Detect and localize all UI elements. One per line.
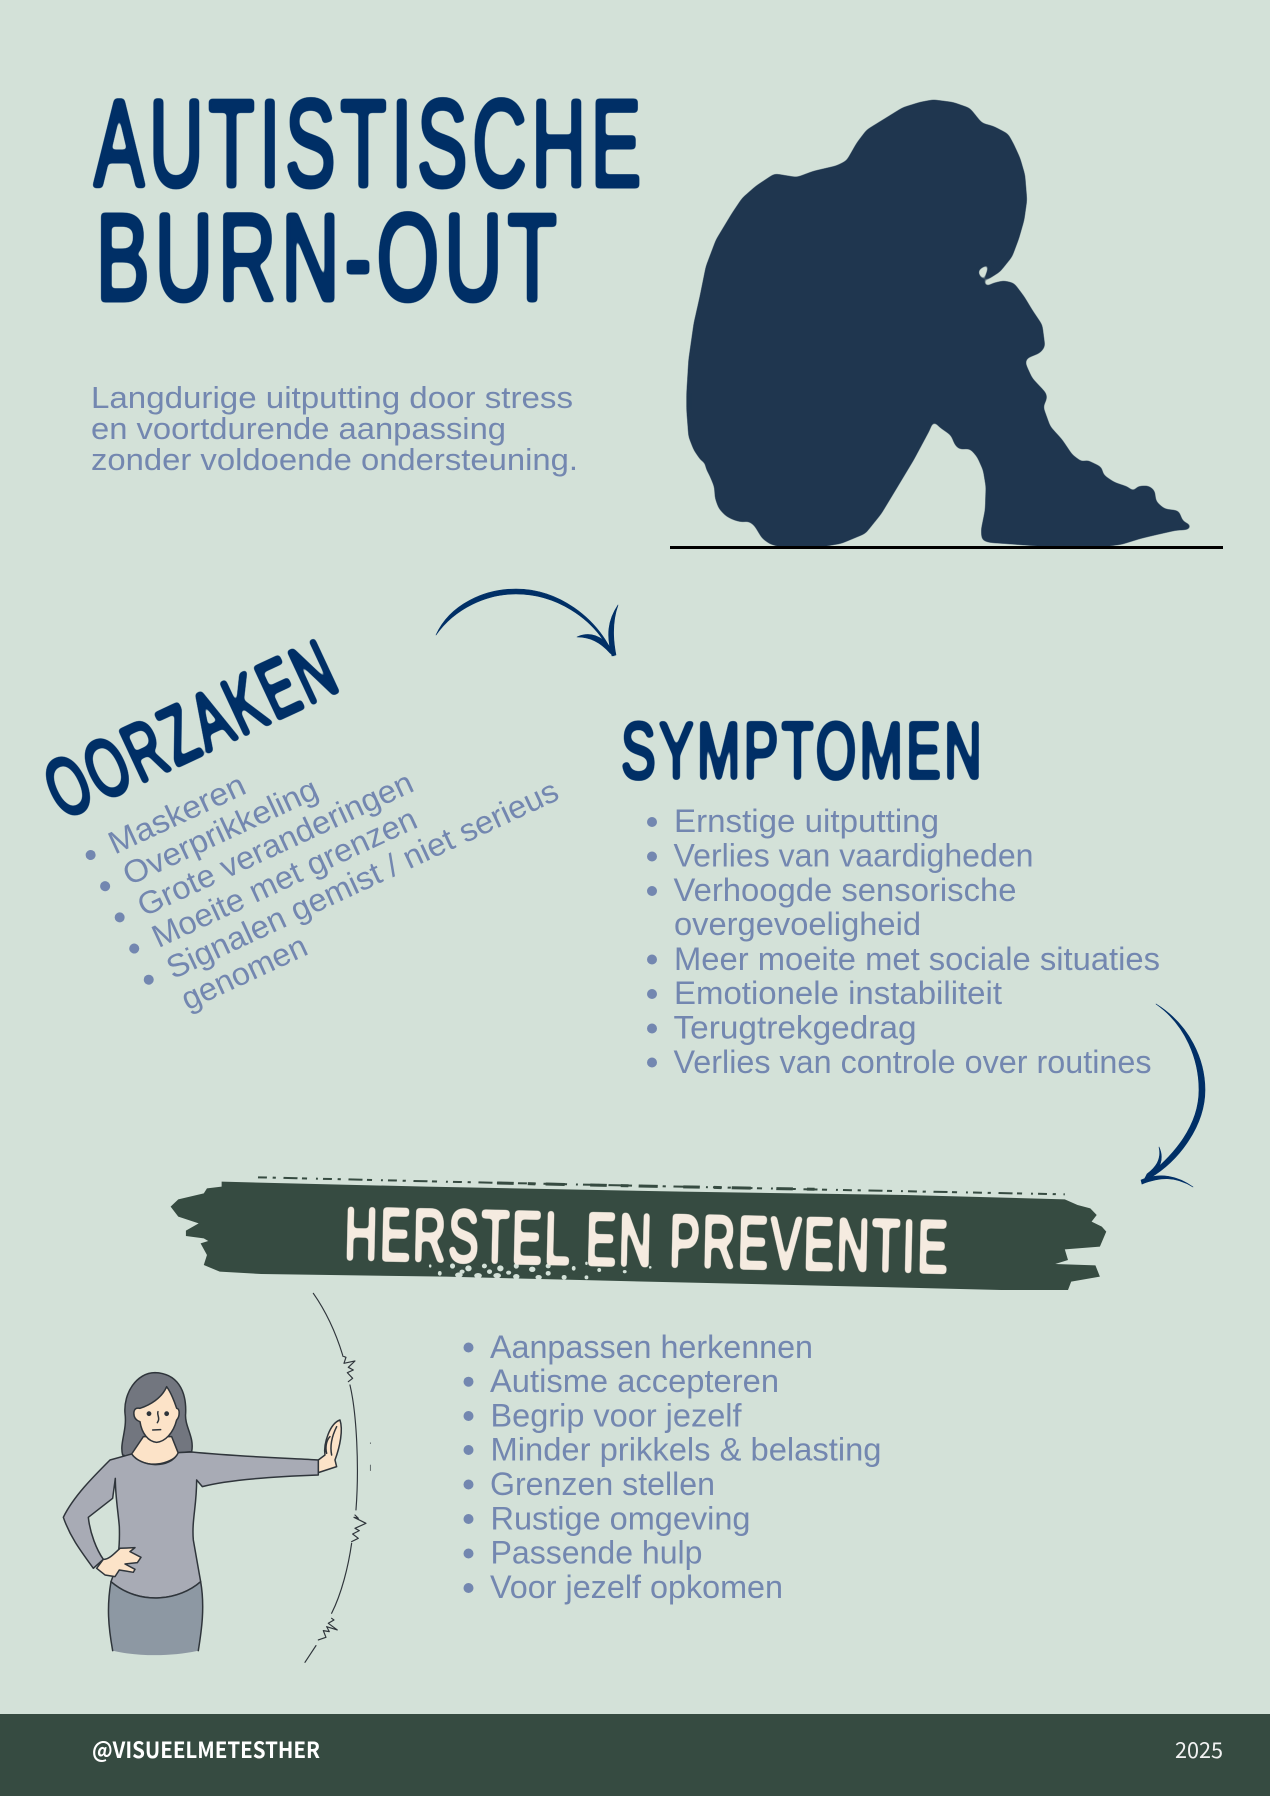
arrow: oorzaken to symptomen <box>436 589 618 656</box>
neck <box>132 1437 178 1464</box>
boundary line <box>305 1293 366 1662</box>
title: BURN-OUT <box>96 190 562 327</box>
list: oorzaken: Overprikkeling <box>117 770 323 892</box>
list: symptomen <box>647 803 1160 1080</box>
list: herstel en preventie: Passende hulp <box>490 1535 702 1571</box>
shirt <box>63 1452 318 1598</box>
list: herstel en preventie: Begrip voor jezelf <box>490 1397 742 1433</box>
list: herstel en preventie: Aanpassen herkennen <box>490 1329 813 1365</box>
hand on hip <box>97 1548 141 1577</box>
list: herstel en preventie: Minder prikkels & belasting <box>490 1432 882 1468</box>
list: symptomen: overgevoeligheid <box>674 906 921 942</box>
face <box>134 1387 179 1442</box>
list: herstel en preventie: Autisme accepteren <box>490 1363 779 1399</box>
list: oorzaken: genomen <box>175 927 313 1017</box>
footer: 2025 <box>1175 1733 1223 1765</box>
list: symptomen: Verlies van controle over routines <box>674 1044 1152 1080</box>
illustration: seated silhouette on ground line <box>670 100 1223 549</box>
title: AUTISTISCHE <box>94 76 646 213</box>
arrow: symptomen to herstel <box>1141 1004 1205 1187</box>
list: oorzaken: Moeite met grenzen <box>146 800 422 955</box>
list: oorzaken: Signalen gemist / niet serieus <box>161 772 564 986</box>
title <box>94 76 646 327</box>
list: herstel en preventie: Rustige omgeving <box>490 1500 750 1536</box>
footer <box>0 1714 1270 1796</box>
skirt <box>108 1582 203 1655</box>
facial features <box>147 1412 168 1430</box>
banner: herstel en preventie <box>171 1177 1106 1290</box>
list: herstel en preventie: Voor jezelf opkomen <box>490 1569 783 1605</box>
list: symptomen: Meer moeite met sociale situaties <box>674 941 1160 977</box>
heading: oorzaken: OORZAKEN <box>31 622 352 836</box>
list: symptomen: Terugtrekgedrag <box>674 1010 916 1046</box>
list: oorzaken: Grote veranderingen <box>132 764 419 923</box>
list: symptomen: Ernstige uitputting <box>674 803 939 839</box>
list: herstel en preventie: Grenzen stellen <box>490 1466 715 1502</box>
raised hand <box>318 1420 341 1473</box>
list: herstel en preventie <box>464 1329 882 1605</box>
intro text <box>91 380 578 477</box>
list: symptomen: Verlies van vaardigheden <box>674 838 1034 874</box>
list: oorzaken <box>78 648 578 1028</box>
heading: symptomen: SYMPTOMEN <box>621 706 985 795</box>
intro text: zonder voldoende ondersteuning. <box>91 442 578 477</box>
list: symptomen: Emotionele instabiliteit <box>674 975 1002 1011</box>
hair <box>122 1373 192 1457</box>
intro text: en voortdurende aanpassing <box>91 411 506 446</box>
list: symptomen: Verhoogde sensorische <box>674 872 1016 908</box>
intro text: Langdurige uitputting door stress <box>91 380 573 415</box>
list: oorzaken: Maskeren <box>103 766 251 861</box>
illustration: woman pushing against boundary <box>63 1293 370 1662</box>
footer: @VISUEELMETESTHER <box>92 1733 320 1765</box>
